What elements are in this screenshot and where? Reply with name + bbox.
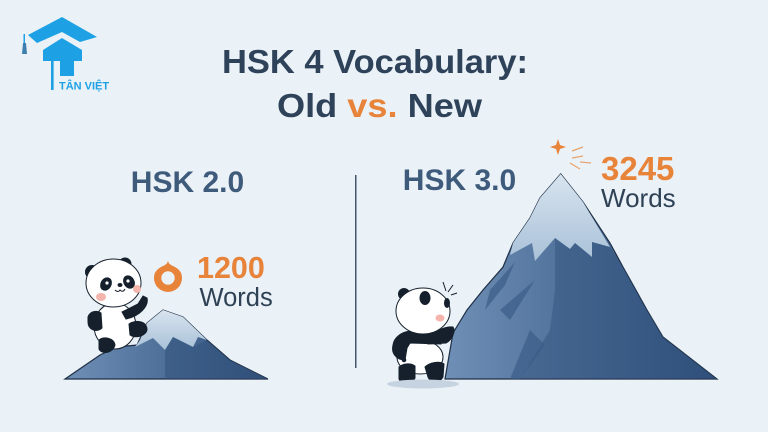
small mountain	[65, 310, 268, 379]
big mountain	[445, 174, 717, 379]
stat: 1200 words: 1200	[197, 251, 265, 285]
stat: 3245 words: Words	[601, 183, 676, 213]
panda shadow	[387, 380, 459, 388]
logo wordmark: TÂN VIỆT	[59, 80, 109, 92]
stat: 1200 words: Words	[200, 284, 273, 312]
stat: 1200 words	[197, 251, 273, 312]
title: Old vs. New	[277, 87, 482, 124]
stat: 3245 words	[601, 150, 676, 213]
heading: HSK 2.0: HSK 2.0	[131, 166, 244, 199]
icon: orange ring	[154, 260, 182, 292]
panda climbing small mountain	[86, 258, 147, 352]
stat: 3245 words: 3245	[601, 150, 674, 187]
title	[222, 43, 528, 124]
divider	[355, 175, 356, 368]
heading: HSK 3.0: HSK 3.0	[403, 164, 516, 197]
panda looking up	[393, 282, 457, 383]
title: HSK 4 Vocabulary:	[222, 43, 528, 80]
icon: sparkle and rays	[550, 139, 591, 169]
logo: Tân Việt	[22, 17, 109, 92]
icon: graduation cap	[22, 17, 97, 90]
